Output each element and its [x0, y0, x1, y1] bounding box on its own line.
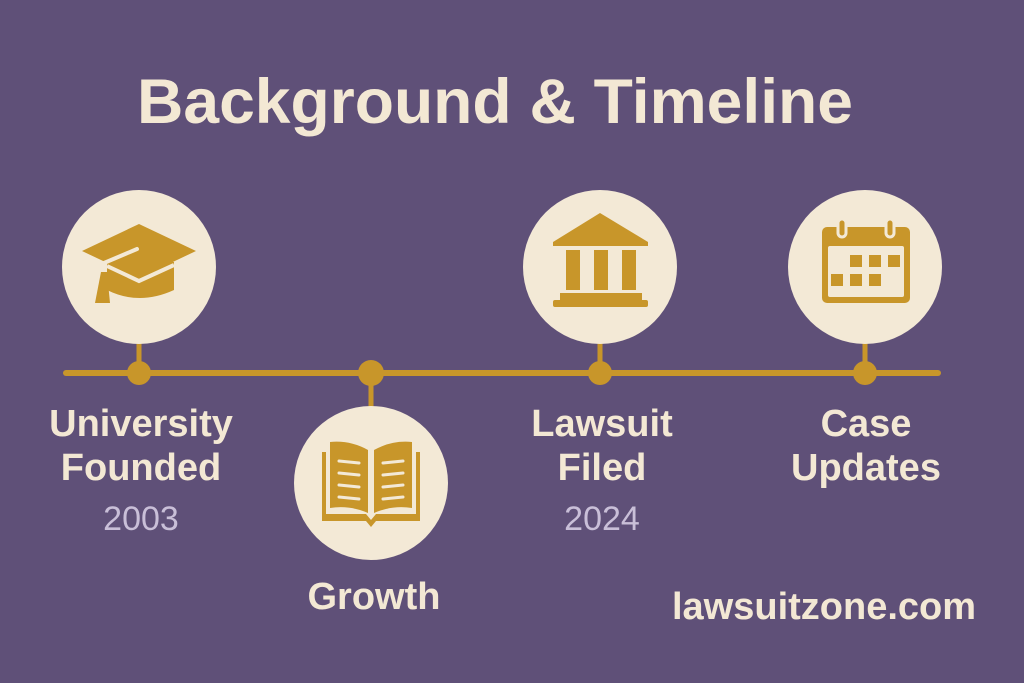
label: University Founded 2003: 2003	[103, 500, 179, 538]
icon: calendar	[788, 190, 942, 344]
label: Lawsuit Filed 2024	[531, 403, 673, 538]
label: Growth: Growth	[308, 576, 440, 618]
label: University Founded 2003	[49, 403, 233, 538]
label: Case Updates	[791, 403, 941, 489]
label: Lawsuit Filed 2024: Filed	[558, 447, 646, 489]
icon: open book	[294, 406, 448, 560]
label: Case Updates: Case	[821, 403, 911, 445]
label: Case Updates: Updates	[791, 447, 941, 489]
footer url: lawsuitzone.com	[672, 586, 976, 628]
label: Lawsuit Filed 2024: 2024	[564, 500, 640, 538]
label: University Founded 2003: Founded	[61, 447, 221, 489]
label: University Founded 2003: University	[49, 403, 233, 445]
label: Lawsuit Filed 2024: Lawsuit	[531, 403, 673, 445]
icon: graduation cap	[62, 190, 216, 344]
icon: courthouse	[523, 190, 677, 344]
timeline line	[66, 340, 938, 410]
title: Background & Timeline	[137, 67, 853, 137]
